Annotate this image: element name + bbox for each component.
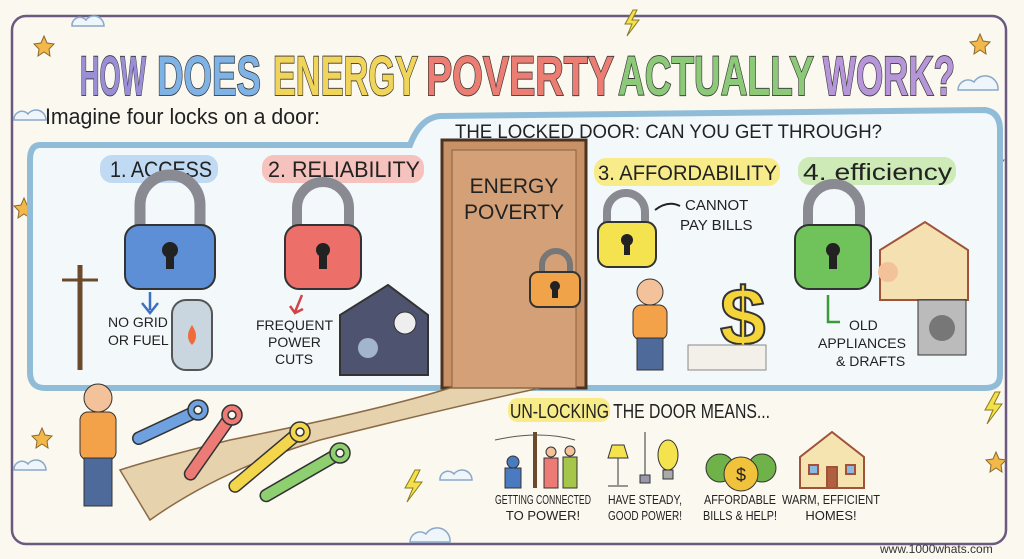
text: old appliances xyxy=(818,295,906,369)
title xyxy=(80,44,955,107)
icon: dollar sign: $ xyxy=(720,272,766,363)
title: POVERTY xyxy=(426,44,614,107)
arrow + text: cannot pay bills: CANNOT xyxy=(685,197,748,214)
text: frequent power cuts: POWER xyxy=(268,334,321,350)
icon: money bags xyxy=(706,454,776,491)
heading: efficiency: 4. efficiency xyxy=(803,159,953,185)
arrow + text: cannot pay bills: PAY BILLS xyxy=(680,217,753,234)
icon: blue lock xyxy=(125,175,215,289)
labels: benefits: AFFORDABLE xyxy=(704,492,776,507)
labels: benefits: WARM, EFFICIENT xyxy=(782,492,880,507)
door: ENERGY xyxy=(470,175,558,198)
icon: yellow lock xyxy=(598,193,656,267)
icon: money bags: $ xyxy=(736,465,746,485)
path xyxy=(120,388,540,520)
labels: benefits: TO POWER! xyxy=(506,508,580,523)
icon: workers xyxy=(495,432,577,488)
title: HOW xyxy=(80,44,146,107)
text: frequent power cuts: FREQUENT xyxy=(256,317,333,333)
labels: benefits: GOOD POWER! xyxy=(608,508,682,523)
icon: dark house xyxy=(340,285,428,375)
heading: affordability: 3. AFFORDABILITY xyxy=(598,162,777,185)
icon: lamps xyxy=(608,432,678,486)
door xyxy=(442,140,586,388)
title: ACTUALLY xyxy=(618,44,814,107)
labels: benefits: BILLS & HELP! xyxy=(703,508,777,523)
arrow + text: cannot pay bills xyxy=(655,197,753,234)
door: POVERTY xyxy=(464,201,564,224)
labels: benefits xyxy=(495,492,880,523)
title: ENERGY xyxy=(273,44,418,107)
text: frequent power cuts xyxy=(256,295,333,367)
labels: benefits: HAVE STEADY, xyxy=(608,492,682,507)
text: no grid or fuel: NO GRID xyxy=(108,314,168,330)
title: DOES xyxy=(157,44,261,107)
icon: door lock xyxy=(530,251,580,307)
icon: worried person xyxy=(633,279,667,370)
text: frequent power cuts: CUTS xyxy=(275,351,313,367)
panel: locked door: THE LOCKED DOOR: CAN YOU GET THROUGH? xyxy=(455,122,882,143)
text: no grid or fuel xyxy=(108,292,169,348)
text: old appliances: & DRAFTS xyxy=(836,353,905,369)
icon: old house xyxy=(878,222,968,355)
text: old appliances: APPLIANCES xyxy=(818,335,906,351)
decorations: stars and bolts xyxy=(14,34,1006,472)
icon: red lock xyxy=(285,182,361,289)
labels: benefits: HOMES! xyxy=(805,508,857,523)
heading: reliability: 2. RELIABILITY xyxy=(268,157,420,182)
text: old appliances: OLD xyxy=(849,317,878,333)
text: no grid or fuel: OR FUEL xyxy=(108,332,169,348)
footer url: www.1000whats.com xyxy=(879,542,993,556)
heading: un-locking: UN-LOCKING THE DOOR MEANS... xyxy=(510,401,770,423)
labels: benefits: GETTING CONNECTED xyxy=(495,492,591,507)
icon: gas tank xyxy=(172,300,212,370)
subtitle: Imagine four locks on a door: xyxy=(45,104,320,129)
heading: access: 1. ACCESS xyxy=(110,157,212,182)
icon: green lock xyxy=(795,184,871,289)
icon: dollar sign xyxy=(688,272,766,370)
icon: happy house xyxy=(800,432,864,488)
icon: utility pole xyxy=(62,265,98,370)
icon: person with keys xyxy=(80,384,350,506)
